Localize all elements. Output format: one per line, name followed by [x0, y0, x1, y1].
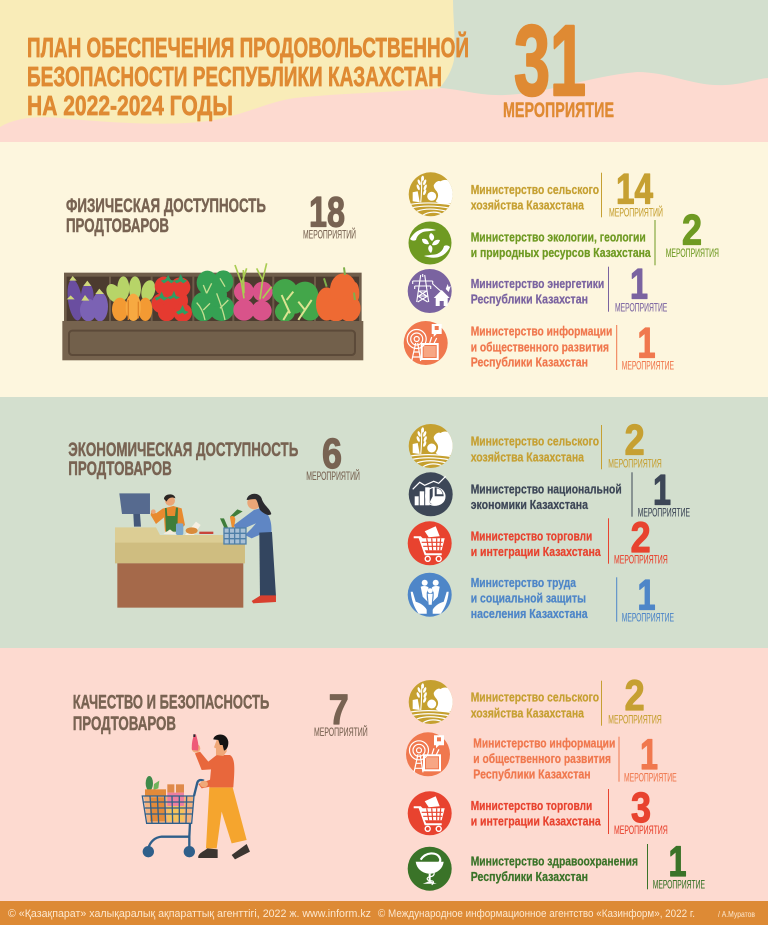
ministry: agriculture, 2: хозяйства Казахстана [471, 449, 584, 464]
heading: physical access: ФИЗИЧЕСКАЯ ДОСТУПНОСТЬ [66, 195, 266, 217]
ministry: trade, 3: 3 [631, 784, 651, 832]
ministry: agriculture, 14: хозяйства Казахстана [471, 197, 584, 212]
ministry: trade, 2: и интеграции Казахстана [471, 544, 601, 559]
ministry: information, 1: Министерство информации [471, 324, 612, 339]
heading: physical access [66, 195, 266, 237]
icon: agriculture [409, 680, 455, 724]
ministry: agriculture, 14 [409, 166, 663, 220]
ministry: agriculture, 2: Министерство сельского [471, 690, 599, 705]
ministry: information, 1: Республики Казахстан [473, 766, 591, 781]
ministry: agriculture, 2: хозяйства Казахстана [471, 705, 584, 720]
count: 7 [314, 686, 368, 739]
ministry: health, 1: Республики Казахстан [471, 869, 588, 884]
footer: © Международное информационное агентство «Казинформ», 2022 г. [378, 908, 695, 920]
ministry: information, 1: 1 [640, 731, 658, 779]
ministry: information, 1: МЕРОПРИЯТИЕ [622, 358, 674, 372]
ministry: energy, 1: Министерство энергетики [471, 276, 604, 291]
ministry: labor, 1: 1 [638, 572, 656, 620]
count: 7: МЕРОПРИЯТИЙ [314, 724, 368, 739]
ministry: trade, 3 [408, 784, 668, 837]
panel: economic access [0, 397, 768, 648]
icon: energy [408, 269, 452, 313]
icon: family in hands [408, 573, 452, 617]
ministry: ecology, 2: МЕРОПРИЯТИЯ [666, 246, 719, 260]
ministry: national economy, 1 [409, 466, 690, 519]
ministry: energy, 1: 1 [630, 260, 648, 308]
ministry: agriculture, 14: Министерство сельского [471, 182, 599, 197]
ministry: agriculture, 2: 2 [625, 672, 645, 720]
icon: trade cart [408, 521, 452, 565]
count: 6 [306, 430, 360, 483]
title: НА 2022-2024 ГОДЫ [27, 90, 233, 121]
ministry: agriculture, 14: 14 [616, 166, 653, 214]
footer [0, 901, 768, 925]
header background [0, 0, 768, 142]
ministry: trade, 2 [408, 514, 668, 566]
icon: agriculture [409, 424, 455, 468]
ministry: information, 1: Республики Казахстан [471, 355, 588, 370]
total count: 31: 31 [514, 5, 586, 117]
ministry: energy, 1 [408, 260, 667, 315]
icon: ecology [408, 222, 452, 264]
count: 6: 6 [322, 430, 342, 478]
ministry: information, 1: и общественного развития [471, 339, 609, 354]
ministry: health, 1: Министерство здравоохранения [471, 854, 638, 869]
ministry: national economy, 1: экономики Казахстана [471, 497, 588, 512]
count: 6: МЕРОПРИЯТИЙ [306, 468, 360, 483]
icon: economy [409, 472, 453, 516]
ministry: trade, 2: МЕРОПРИЯТИЯ [614, 552, 668, 566]
ministry: information, 1: 1 [638, 320, 656, 368]
heading: quality and safety: КАЧЕСТВО И БЕЗОПАСНОСТЬ [73, 691, 269, 713]
ministry: trade, 2: Министерство торговли [471, 528, 592, 543]
ministry: labor, 1: МЕРОПРИЯТИЕ [622, 611, 674, 625]
illustration: cashier and customer [115, 493, 276, 608]
ministry: information, 1: МЕРОПРИЯТИЕ [624, 771, 677, 785]
count: 7: 7 [329, 686, 349, 734]
ministry: agriculture, 2: МЕРОПРИЯТИЯ [608, 712, 662, 726]
count: 18: 18 [309, 188, 345, 236]
ministry: ecology, 2: Министерство экологии, геологии [471, 230, 646, 245]
heading: economic access [68, 439, 298, 480]
icon: bowl of hygieia [408, 847, 452, 891]
ministry: agriculture, 2: Министерство сельского [471, 434, 599, 449]
ministry: health, 1: МЕРОПРИЯТИЕ [653, 878, 705, 892]
total count: 31: МЕРОПРИЯТИЕ [503, 99, 614, 122]
ministry: ecology, 2: и природных ресурсов Казахстана [471, 245, 651, 260]
footer: © «Қазақпарат» халықаралық ақпараттық агенттігі, 2022 ж. www.inform.kz [8, 908, 371, 920]
ministry: trade, 2: 2 [631, 514, 651, 562]
heading: economic access: ЭКОНОМИЧЕСКАЯ ДОСТУПНОСТЬ [68, 439, 298, 461]
ministry: national economy, 1: 1 [653, 466, 671, 514]
title: БЕЗОПАСНОСТИ РЕСПУБЛИКИ КАЗАХСТАН [27, 61, 442, 92]
ministry: labor, 1: и социальной защиты [471, 591, 586, 606]
ministry: national economy, 1: МЕРОПРИЯТИЕ [638, 505, 690, 519]
ministry: labor, 1: населения Казахстана [471, 606, 588, 621]
ministry: information, 1 [406, 731, 677, 785]
heading: quality and safety [73, 691, 269, 735]
icon: trade cart [408, 791, 452, 835]
ministry: ecology, 2: 2 [682, 206, 702, 254]
ministry: information, 1 [404, 320, 674, 372]
title: ПЛАН ОБЕСПЕЧЕНИЯ ПРОДОВОЛЬСТВЕННОЙ [27, 31, 469, 63]
heading: physical access: ПРОДТОВАРОВ [66, 215, 169, 237]
count: 18: МЕРОПРИЯТИЙ [303, 227, 356, 242]
ministry: trade, 3: Министерство торговли [471, 798, 592, 813]
heading: economic access: ПРОДТОВАРОВ [68, 458, 172, 480]
ministry: agriculture, 2: 2 [625, 416, 645, 464]
ministry: health, 1 [408, 838, 705, 892]
panel: physical access [0, 142, 768, 397]
ministry: labor, 1: Министерство труда [471, 575, 576, 590]
ministry: agriculture, 14: МЕРОПРИЯТИЙ [609, 205, 663, 220]
ministry: agriculture, 2: МЕРОПРИЯТИЯ [608, 456, 662, 470]
icon: agriculture [409, 172, 455, 216]
ministry: information, 1: и общественного развития [473, 751, 611, 766]
ministry: ecology, 2 [408, 206, 719, 265]
ministry: energy, 1: МЕРОПРИЯТИЕ [615, 301, 667, 315]
illustration: vegetable stall [62, 263, 363, 360]
ministry: information, 1: Министерство информации [473, 736, 615, 751]
ministry: agriculture, 2 [409, 416, 662, 470]
illustration: shopper with cart [142, 734, 250, 859]
heading: quality and safety: ПРОДТОВАРОВ [73, 713, 176, 735]
footer: / А.Муратов [718, 909, 755, 919]
ministry: agriculture, 2 [409, 672, 662, 726]
ministry: trade, 3: и интеграции Казахстана [471, 814, 601, 829]
ministry: national economy, 1: Министерство национальной [471, 481, 622, 496]
ministry: energy, 1: Республики Казахстан [471, 292, 588, 307]
ministry: labor, 1 [408, 572, 674, 625]
panel: quality and safety [0, 648, 768, 901]
ministry: health, 1: 1 [668, 838, 686, 886]
title [27, 31, 469, 121]
icon: media [404, 321, 448, 365]
icon: media [406, 732, 450, 776]
ministry: trade, 3: МЕРОПРИЯТИЯ [614, 823, 668, 837]
